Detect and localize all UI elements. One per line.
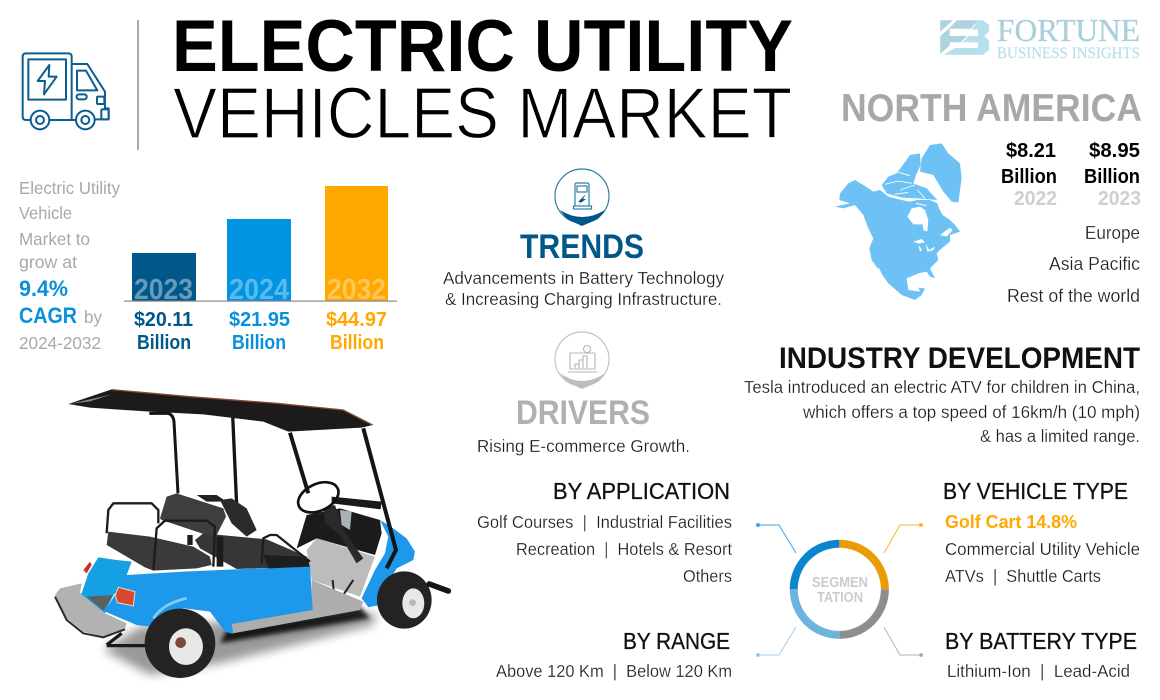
bar 2024 [227,219,291,306]
steering column [323,505,363,563]
ring label [812,574,868,606]
other regions list: Europe [1085,223,1140,243]
bar 2032: 2032 [327,274,386,306]
other regions list: Asia Pacific [1049,254,1140,274]
ring segments [794,544,885,635]
CAGR text block: Vehicle [19,203,72,223]
trends block [443,228,724,309]
list: Others [683,566,732,586]
industry development block [744,342,1140,446]
by battery type block [945,628,1137,681]
headrest back [197,495,227,502]
description: Advancements in Battery Technology [443,268,724,288]
value 2024: $21.95 [229,308,290,331]
roof underside [69,394,112,404]
bar 2023: 2023 [134,274,193,306]
list: Commercial Utility Vehicle [945,539,1140,559]
by range block [496,628,732,681]
value 2023 [1084,139,1141,210]
CAGR text block [19,178,120,353]
other regions list [1007,223,1140,306]
rear seat back [160,493,226,535]
heading: TRENDS [520,228,644,266]
windscreen bar [332,497,382,509]
list: Recreation | Hotels & Resort [516,539,732,559]
list: ATVs | Shuttle Carts [945,566,1101,586]
front seat box [263,555,310,568]
CAGR text block: CAGR [19,303,77,328]
drivers block [477,394,690,456]
front bumper [429,584,448,591]
by application block [477,478,732,586]
CAGR text block: Electric Utility [19,178,120,198]
dash panel [340,510,352,530]
list: Above 120 Km | Below 120 Km [496,661,732,681]
list [477,512,732,586]
segmentation ring [756,524,922,656]
ring label: TATION [817,589,863,606]
logo: Fortune Business Insights [940,12,1140,62]
ring label: SEGMEN [812,574,868,591]
title line 2: VEHICLES MARKET [173,73,792,154]
title [172,4,793,154]
rear bench [107,532,212,571]
value 2032: $44.97 [326,308,387,331]
CAGR text block: 9.4% [19,276,68,301]
logo mark [940,20,989,55]
value 2032: Billion [330,331,384,354]
value 2023: 2023 [1098,188,1141,210]
by vehicle type block [943,478,1140,586]
heading: BY VEHICLE TYPE [943,478,1128,504]
leader: battery type [884,627,922,656]
description: Rising E-commerce Growth. [477,436,690,456]
value 2024 [229,308,290,354]
bar 2023 [132,253,196,306]
rear step edge [55,597,125,637]
dashboard [297,508,382,555]
bar 2024: 2024 [229,274,289,306]
front seat back [220,498,257,537]
tail light small [83,562,92,573]
CAGR text block: 2024-2032 [19,333,101,353]
seat rails [107,503,310,570]
tail light [115,587,135,606]
list: Lithium-Ion | Lead-Acid [947,661,1130,681]
value 2022 [1001,139,1057,210]
other regions list: Rest of the world [1007,286,1140,306]
CAGR text block: grow at [19,252,77,272]
value 2023: Billion [137,331,191,354]
heading: INDUSTRY DEVELOPMENT [779,342,1140,375]
axis line [124,300,397,302]
value 2023: Billion [1084,165,1140,188]
floor plate [227,580,363,633]
roof edge [112,390,373,425]
rear wheel [145,609,215,678]
map: North America [835,143,962,300]
leader: application [756,524,796,553]
list [945,539,1140,586]
description: & Increasing Charging Infrastructure. [445,289,722,309]
description: which offers a top speed of 16km/h (10 mph) [802,402,1140,422]
heading: DRIVERS [516,394,650,432]
icon: trends charging station [555,169,609,226]
bar chart [124,186,397,354]
value 2023: $8.95 [1089,139,1140,162]
heading: BY APPLICATION [553,478,730,504]
icon: drivers laptop chart [555,332,609,389]
rear step mat [87,595,113,611]
rear frame [107,633,145,646]
value 2032 [326,308,387,354]
steering wheel [293,476,343,518]
value 2024: Billion [232,331,286,354]
map: channels, bays and lakes [907,207,953,252]
floor mat [307,538,375,597]
value 2023 [134,308,193,354]
description [744,377,1140,446]
highlight: Golf Cart 14.8% [945,511,1077,532]
roof [68,389,373,432]
heading: BY RANGE [623,628,730,654]
pedals [333,580,353,600]
logo wordmark: FORTUNE [997,12,1140,48]
golf cart illustration [55,389,448,678]
front body [362,520,415,607]
body highlight [153,598,187,618]
support posts [149,408,308,505]
icon: electric truck [23,53,109,129]
cart shadow [103,607,377,675]
rear step [55,583,127,637]
description: Tesla introduced an electric ATV for children in China, [744,377,1140,397]
leader: vehicle type [884,524,922,553]
value 2022: Billion [1001,165,1057,188]
list: Golf Courses | Industrial Facilities [477,512,732,532]
description [443,268,724,309]
region values [1001,139,1141,210]
front bench [195,533,311,569]
value 2023: $20.11 [134,308,193,331]
main blue body [105,566,313,634]
leader: range [756,627,796,656]
CAGR text block: Market to [19,229,90,249]
rear panel [80,557,132,613]
title line 1: ELECTRIC UTILITY [172,4,793,87]
value 2022: 2022 [1014,188,1057,210]
front wheel [377,571,432,629]
front right post [363,428,396,568]
heading: BY BATTERY TYPE [945,628,1137,654]
CAGR text block: by [84,307,102,327]
divider [137,20,139,150]
bar 2032 [325,186,388,306]
value 2022: $8.21 [1006,139,1056,162]
description: & has a limited range. [980,426,1140,446]
logo tagline: BUSINESS INSIGHTS [997,45,1140,62]
